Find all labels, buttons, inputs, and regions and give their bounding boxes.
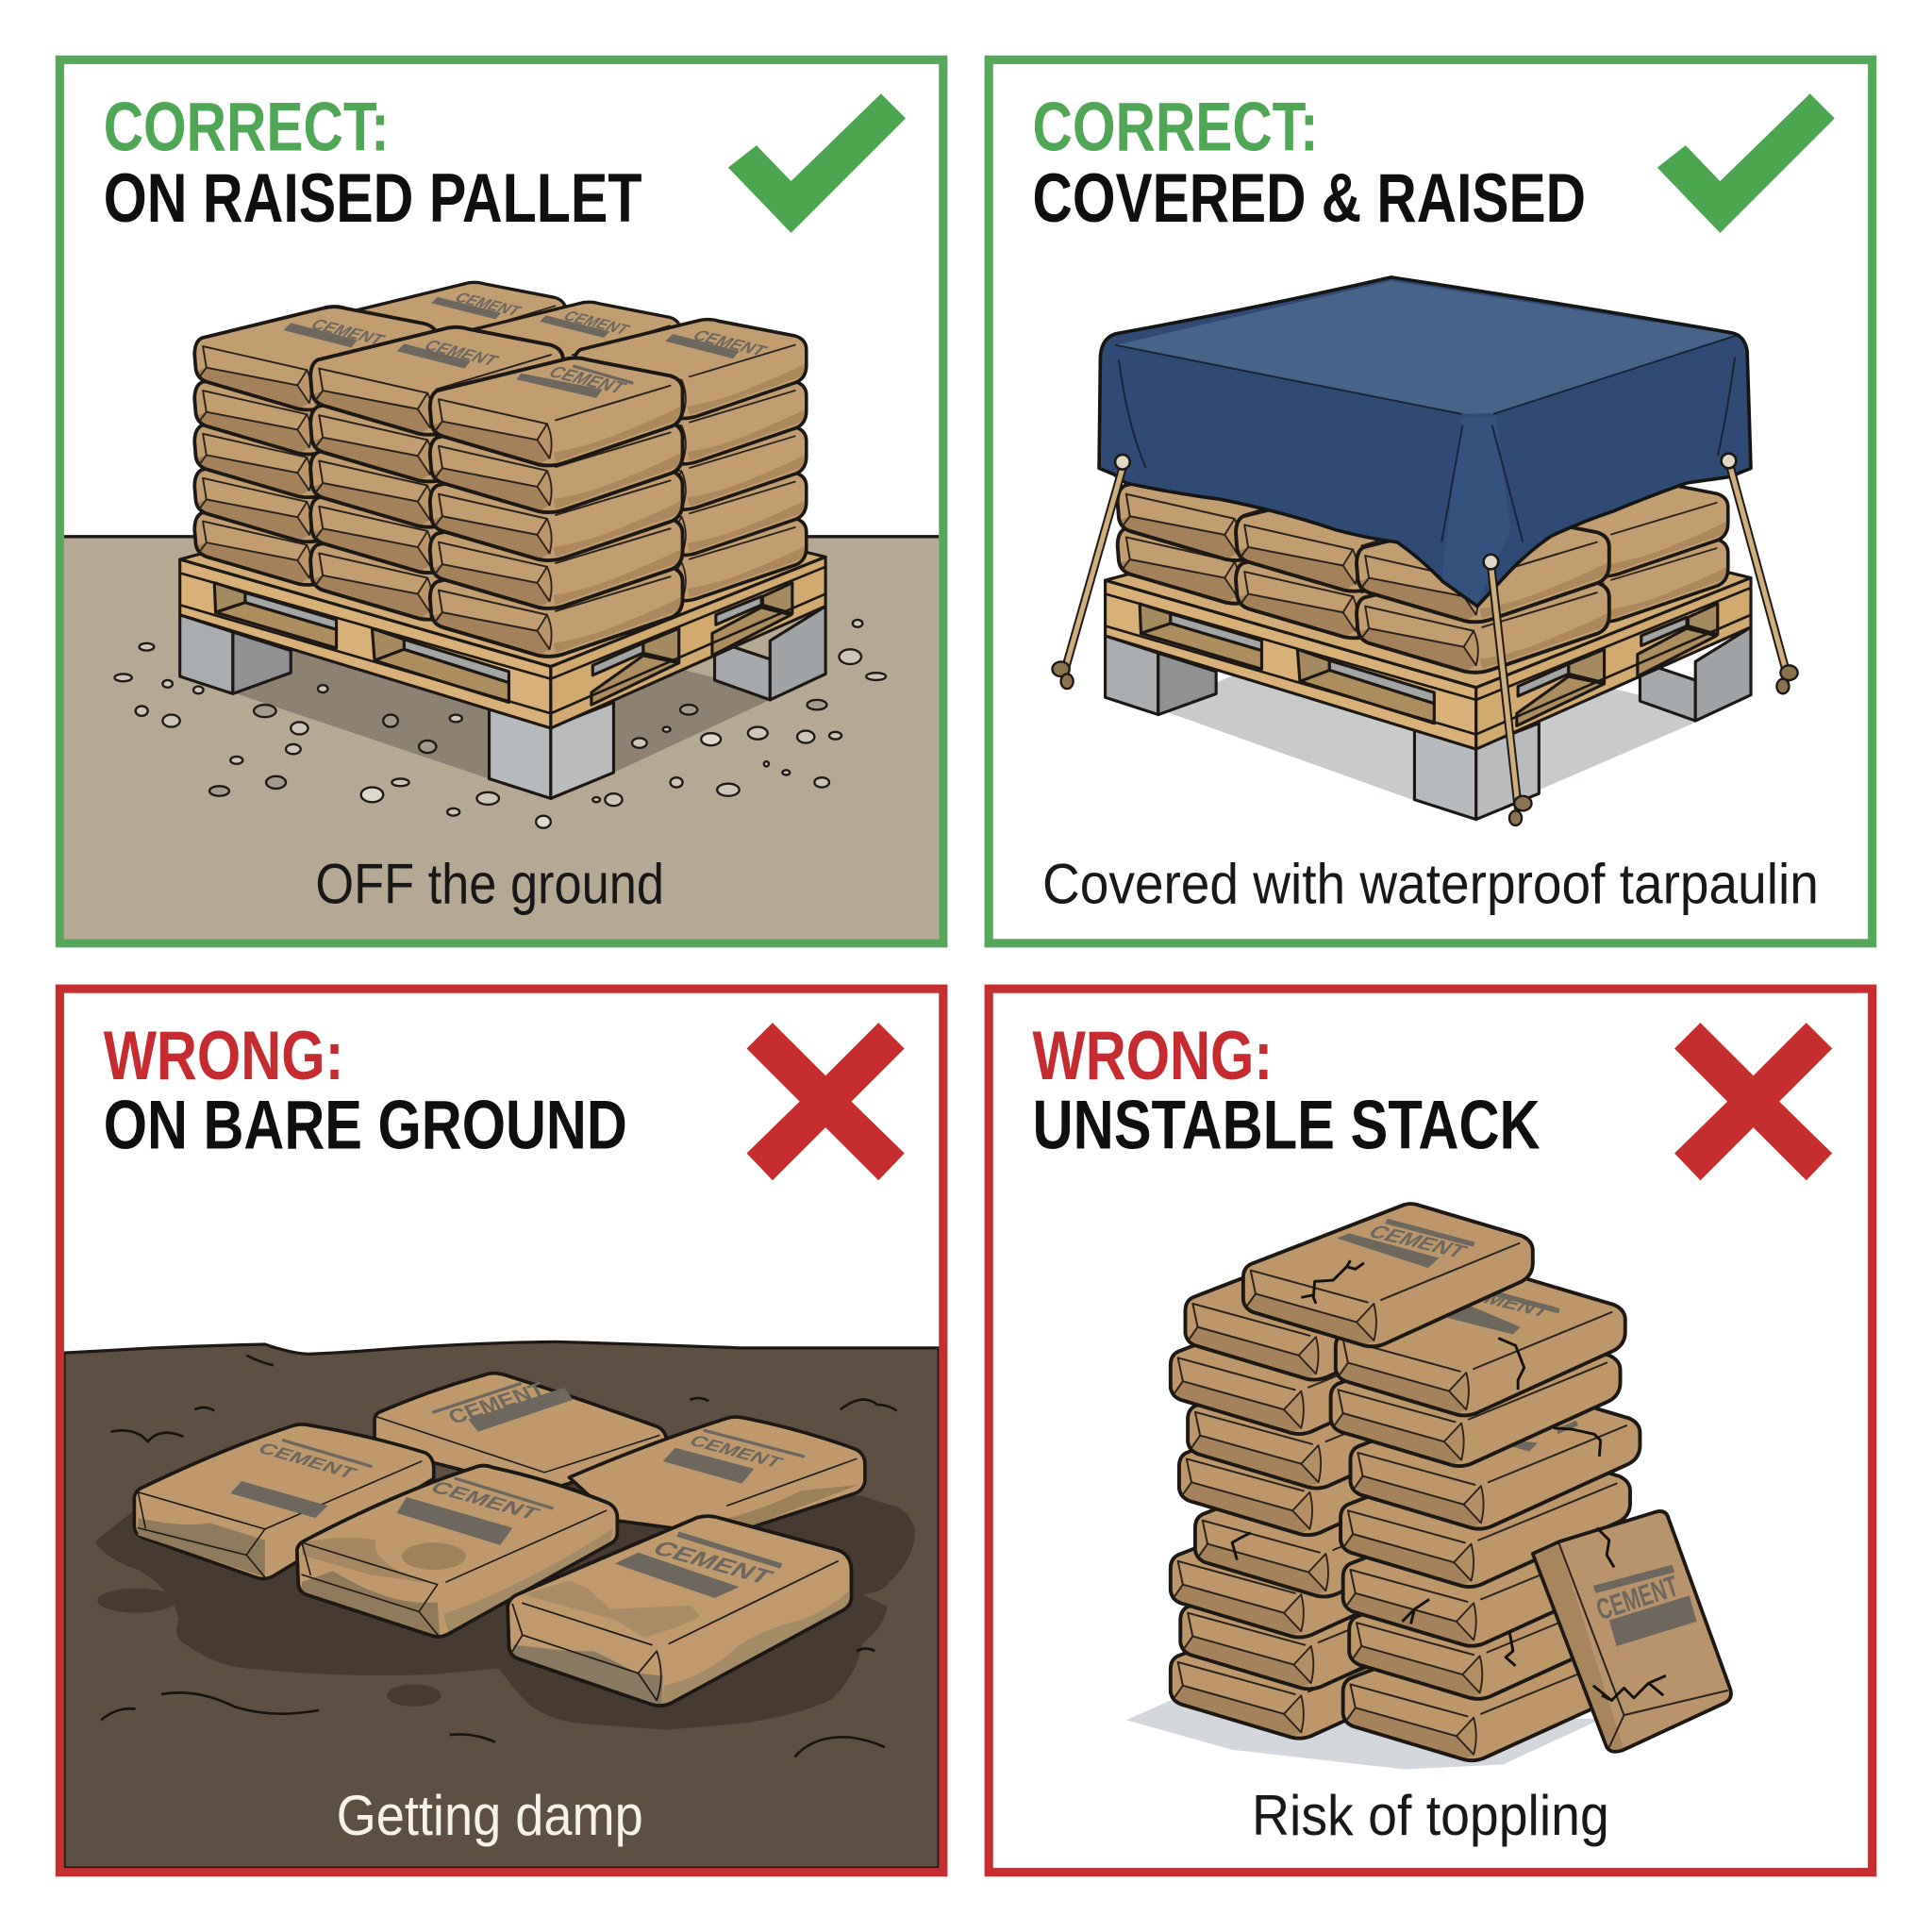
panel border — [989, 59, 1873, 943]
heading: CORRECT: — [1033, 89, 1319, 165]
caption: OFF the ground — [315, 852, 664, 915]
bag labels: CEMENT — [307, 316, 390, 348]
stack of cement bags — [194, 282, 807, 657]
right bag: CEMENT — [685, 1432, 788, 1471]
pallet shadow — [233, 591, 770, 798]
pallet on blocks — [1106, 496, 1751, 820]
left bag column — [1171, 1237, 1485, 1739]
heading: WRONG: — [1033, 1018, 1273, 1094]
front bag: CEMENT — [647, 1538, 778, 1589]
caption: Risk of toppling — [1252, 1784, 1609, 1847]
icon: red cross — [747, 1023, 905, 1180]
caption: Getting damp — [337, 1784, 643, 1847]
panel border — [59, 59, 943, 943]
bag labels: CEMENT — [543, 363, 630, 397]
hidden label patches — [1512, 1421, 1578, 1452]
heading: COVERED & RAISED — [1033, 160, 1586, 237]
partly hidden bag label: CEMENT — [1448, 1282, 1557, 1321]
top bag — [1243, 1204, 1533, 1346]
right bag — [569, 1417, 865, 1535]
soil cracks — [101, 1356, 897, 1757]
caption: Covered with waterproof tarpaulin — [1042, 852, 1819, 915]
leaning bag: CEMENT — [1592, 1569, 1682, 1626]
cracks — [1232, 1260, 1666, 1700]
panel: wrong unstable stack — [989, 989, 1873, 1873]
damp puddles — [95, 1478, 915, 1730]
heading: WRONG: — [104, 1018, 343, 1094]
heading: ON RAISED PALLET — [104, 160, 641, 237]
ropes with grommets and knots — [1052, 454, 1798, 825]
leaning bag — [1533, 1511, 1731, 1752]
heading — [104, 89, 641, 237]
panel: wrong on bare ground — [59, 989, 943, 1873]
center bag — [297, 1466, 617, 1638]
bag labels: CEMENT — [689, 326, 772, 359]
icon: red cross — [1674, 1023, 1832, 1180]
top bag label — [1337, 1219, 1474, 1268]
icon: check mark — [728, 93, 906, 233]
damp cement bags — [134, 1374, 865, 1707]
panel: correct covered and raised — [989, 59, 1873, 943]
bags under the tarp — [1118, 453, 1728, 673]
floor — [64, 537, 939, 939]
bag labels: CEMENT — [559, 308, 634, 338]
ground shadow — [1157, 623, 1699, 801]
right bag column — [1331, 1273, 1640, 1760]
bag labels — [283, 290, 772, 398]
heading: UNSTABLE STACK — [1033, 1087, 1541, 1163]
left bag: CEMENT — [253, 1440, 361, 1482]
blue tarpaulin — [1099, 277, 1751, 607]
center bag: CEMENT — [425, 1478, 544, 1524]
heading: CORRECT: — [104, 89, 390, 165]
heading: ON BARE GROUND — [104, 1087, 627, 1163]
partly hidden bag label — [1421, 1282, 1560, 1335]
top bag label: CEMENT — [1363, 1222, 1473, 1261]
panel border — [59, 989, 943, 1873]
heading — [104, 1018, 627, 1163]
front bag — [508, 1516, 852, 1707]
panel border — [989, 989, 1873, 1873]
soil — [64, 1341, 939, 1868]
panel: correct on raised pallet — [59, 59, 943, 943]
bag labels: CEMENT — [451, 290, 525, 319]
heading — [1033, 1018, 1541, 1163]
ground shadow — [1126, 1700, 1602, 1770]
left bag — [134, 1424, 434, 1579]
back bag: CEMENT — [444, 1379, 550, 1428]
back bag — [375, 1374, 667, 1491]
gravel stones — [114, 620, 886, 828]
wooden pallet on concrete blocks — [180, 475, 825, 798]
icon: check mark — [1657, 93, 1835, 233]
bag labels: CEMENT — [420, 337, 504, 369]
heading — [1033, 89, 1586, 237]
